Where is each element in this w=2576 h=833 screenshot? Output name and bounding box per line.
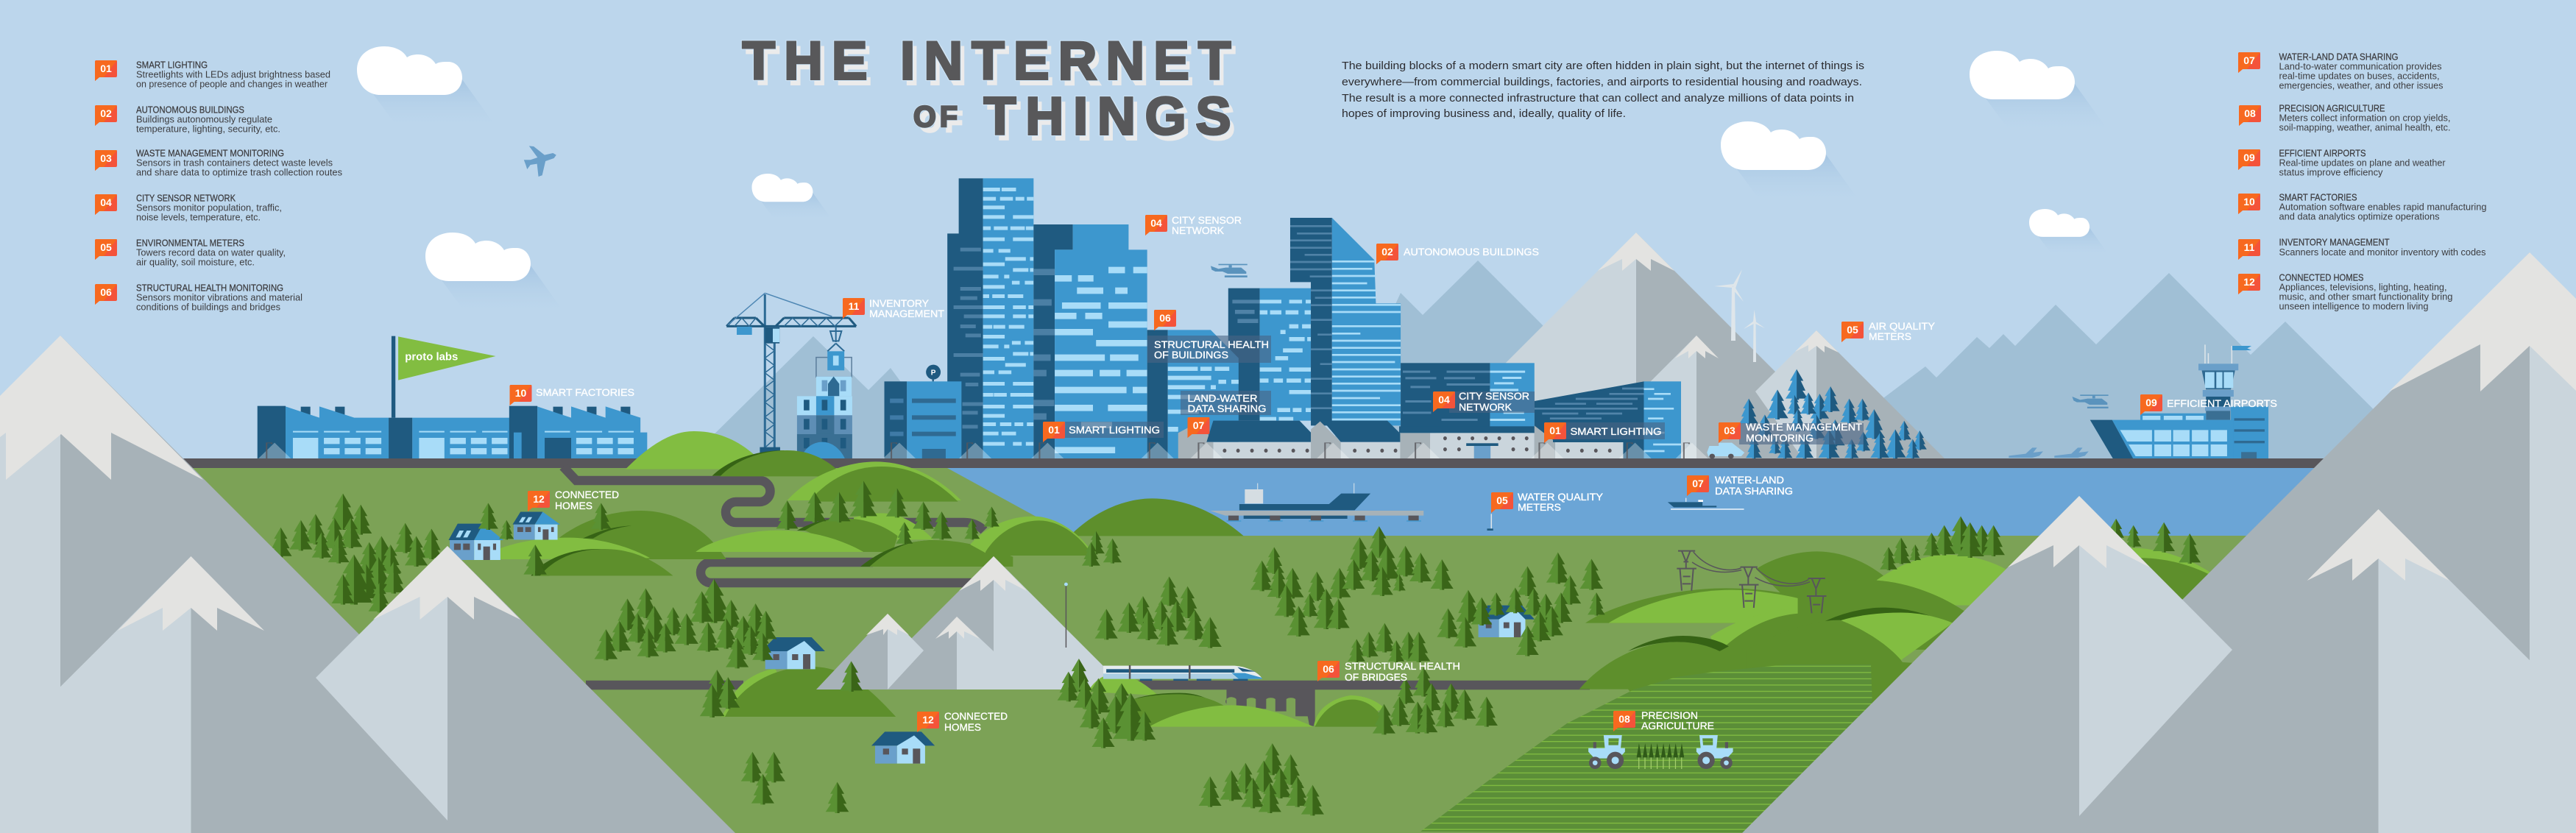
title: The Internet of Things: THINGS bbox=[983, 87, 1231, 146]
legend item 07: emergencies, weather, and other issues bbox=[2279, 79, 2444, 91]
pine trees, centre bbox=[964, 506, 1911, 815]
map label: 08 precision agriculture: PRECISION bbox=[1641, 709, 1698, 721]
map label: 12 connected homes: CONNECTED bbox=[555, 489, 619, 500]
factories, crane and parking building bbox=[258, 293, 961, 458]
legend item 09: EFFICIENT AIRPORTS bbox=[2279, 147, 2366, 159]
icon: tower crane bbox=[726, 293, 856, 458]
map label: 11 inventory management: 11 bbox=[849, 300, 860, 312]
foreground mountains, right bbox=[1742, 252, 2576, 833]
legend item 01: 01 bbox=[100, 63, 112, 74]
legend item 05: air quality, soil moisture, etc. bbox=[136, 256, 255, 268]
map label: 01 smart lighting, second bbox=[1544, 422, 1665, 443]
tower 3 bbox=[1147, 330, 1239, 458]
map label: 07 water-land data sharing bbox=[1687, 474, 1793, 497]
map label: 06 structural health of buildings: 06 bbox=[1159, 312, 1171, 324]
map label: 04 city sensor network, second bbox=[1433, 390, 1535, 413]
icon: ship and pier bbox=[1210, 483, 1423, 522]
legend item 06: Sensors monitor vibrations and material bbox=[136, 291, 302, 303]
hills, upper left bbox=[500, 431, 1013, 717]
crop field with stripes bbox=[1413, 662, 1884, 833]
map label: 04 city sensor network, second: NETWORK bbox=[1459, 401, 1512, 413]
map label: 04 city sensor network bbox=[1145, 214, 1242, 236]
legend item 08: PRECISION AGRICULTURE bbox=[2279, 103, 2385, 113]
intro paragraph bbox=[1342, 60, 1864, 120]
map label: 12 connected homes, second: HOMES bbox=[944, 721, 981, 733]
tower 7 bbox=[1535, 381, 1681, 458]
map label: 01 smart lighting bbox=[1043, 422, 1164, 442]
legend: right list bbox=[2238, 52, 2486, 312]
map label: 12 connected homes, second: 12 bbox=[922, 714, 934, 726]
legend item 05 bbox=[95, 237, 286, 268]
map label: 06 structural health of bridges: STRUCTURAL HEALTH bbox=[1345, 660, 1460, 672]
map label: 02 autonomous buildings: 02 bbox=[1381, 246, 1393, 258]
map label: 04 city sensor network: CITY SENSOR bbox=[1172, 214, 1242, 226]
factory row bbox=[258, 406, 647, 458]
legend item 11: INVENTORY MANAGEMENT bbox=[2279, 237, 2390, 247]
legend item 12: music, and other smart functionality bring bbox=[2279, 291, 2452, 302]
map label: 02 autonomous buildings: AUTONOMOUS BUILDINGS bbox=[1404, 246, 1539, 258]
title: The Internet of Things bbox=[742, 31, 1235, 152]
water bbox=[947, 468, 2340, 536]
airport bbox=[2009, 344, 2268, 458]
Proto Labs flag bbox=[398, 336, 495, 380]
legend item 02: 02 bbox=[100, 107, 112, 119]
grey mountains behind city bbox=[1410, 233, 1945, 458]
map label: 07 land-water data sharing bbox=[1181, 391, 1271, 438]
legend item 10: SMART FACTORIES bbox=[2279, 191, 2357, 203]
map label: 12 connected homes bbox=[528, 489, 619, 511]
legend item 11: 11 bbox=[2244, 241, 2255, 253]
legend item 01: SMART LIGHTING bbox=[136, 59, 208, 71]
map label: 07 water-land data sharing: WATER-LAND bbox=[1715, 474, 1784, 486]
legend item 09: 09 bbox=[2243, 152, 2255, 163]
tractor left bbox=[1588, 735, 1625, 769]
map label: 05 air quality meters bbox=[1841, 320, 1936, 342]
icon: garbage truck bbox=[1707, 443, 1744, 458]
icon: light pole bbox=[1064, 583, 1068, 648]
legend item 01: on presence of people and changes in weather bbox=[136, 78, 328, 90]
foreground mountains, left bbox=[0, 336, 735, 833]
map label: 04 city sensor network: 04 bbox=[1150, 217, 1162, 229]
tower 1 bbox=[947, 178, 1033, 458]
clouds bbox=[357, 46, 2110, 316]
tractor right bbox=[1696, 735, 1733, 769]
map label: 06 structural health of bridges: OF BRIDGES bbox=[1345, 671, 1407, 683]
pine trees, left side bbox=[269, 481, 952, 813]
map label: 04 city sensor network, second: CITY SENSOR bbox=[1459, 390, 1529, 402]
legend item 12: unseen intelligence to modern living bbox=[2279, 300, 2429, 312]
map label: 10 smart factories bbox=[509, 385, 634, 405]
title: The Internet of Things: OF bbox=[919, 106, 963, 138]
intro paragraph: hopes of improving business and, ideally, quality of life. bbox=[1342, 108, 1626, 120]
icon: flag pole bbox=[392, 336, 395, 418]
icon: small boat bbox=[1668, 498, 1744, 510]
map label: 12 connected homes: 12 bbox=[533, 493, 545, 505]
title: The Internet of Things: THINGS bbox=[988, 93, 1235, 152]
map label: 07 water-land data sharing: DATA SHARING bbox=[1715, 485, 1793, 497]
map label: 07 land-water data sharing: DATA SHARING bbox=[1188, 403, 1266, 414]
map label: 05 water quality meters: 05 bbox=[1496, 495, 1508, 506]
winding roads bbox=[563, 467, 1590, 685]
map label: 01 smart lighting: SMART LIGHTING bbox=[1069, 424, 1160, 436]
map label: 06 structural health of buildings: OF BUILDINGS bbox=[1154, 349, 1228, 361]
icon: power line towers bbox=[1677, 551, 1826, 613]
legend item 06: conditions of buildings and bridges bbox=[136, 302, 280, 312]
map label: 05 air quality meters: 05 bbox=[1847, 324, 1858, 336]
map label: 01 smart lighting, second: SMART LIGHTING bbox=[1571, 425, 1662, 437]
hills, far right bbox=[1746, 548, 2211, 833]
map label: 06 structural health of bridges: 06 bbox=[1323, 663, 1334, 675]
legend item 04: CITY SENSOR NETWORK bbox=[136, 193, 236, 203]
map label: 03 waste management monitoring: MONITORING bbox=[1746, 432, 1814, 444]
legend item 07: real-time updates on buses, accidents, bbox=[2279, 71, 2439, 81]
legend item 10: 10 bbox=[2243, 196, 2255, 208]
map label: 05 water quality meters bbox=[1491, 491, 1604, 513]
legend item 04: 04 bbox=[100, 196, 112, 208]
legend item 10: Automation software enables rapid manufacturing bbox=[2279, 202, 2486, 212]
main road along the waterfront bbox=[177, 458, 2333, 468]
map label: 12 connected homes, second bbox=[917, 710, 1008, 733]
legend item 06: STRUCTURAL HEALTH MONITORING bbox=[136, 283, 283, 293]
map label: 08 precision agriculture: 08 bbox=[1618, 713, 1630, 725]
legend item 07: Land-to-water communication provides bbox=[2279, 60, 2442, 72]
under-construction building bbox=[797, 358, 852, 458]
legend item 02: AUTONOMOUS BUILDINGS bbox=[136, 104, 244, 115]
legend item 06: 06 bbox=[100, 286, 112, 298]
map label: 11 inventory management: MANAGEMENT bbox=[869, 308, 944, 319]
map label: 07 land-water data sharing: 07 bbox=[1193, 419, 1204, 431]
icon: tractors and crops bbox=[1588, 735, 1733, 769]
legend item 04 bbox=[95, 193, 282, 222]
legend item 10 bbox=[2238, 191, 2486, 222]
legend item 12: 12 bbox=[2243, 276, 2255, 288]
tower 6 bbox=[1401, 363, 1535, 427]
city buildings: towers bbox=[947, 178, 1681, 458]
legend item 08 bbox=[2239, 103, 2451, 132]
legend item 04: Sensors monitor population, traffic, bbox=[136, 202, 282, 213]
map label: 05 water quality meters: WATER QUALITY bbox=[1518, 491, 1604, 503]
legend item 01 bbox=[95, 59, 330, 90]
map label: 05 water quality meters: METERS bbox=[1518, 501, 1561, 513]
tower 2 bbox=[1033, 224, 1147, 458]
map label: 04 city sensor network: NETWORK bbox=[1172, 224, 1225, 236]
legend item 02: Buildings autonomously regulate bbox=[136, 113, 272, 125]
center snow mountains bbox=[816, 556, 1127, 690]
tower 5 bbox=[1290, 218, 1401, 425]
map label: 12 connected homes: HOMES bbox=[555, 500, 592, 511]
map label: 03 waste management monitoring: 03 bbox=[1724, 425, 1735, 436]
legend item 12: Appliances, televisions, lighting, heating, bbox=[2279, 281, 2446, 293]
hills, centre and right bbox=[970, 498, 1994, 833]
pine forest by the road (blue trees) bbox=[1739, 369, 1927, 458]
title: The Internet of Things: THINGS bbox=[983, 87, 1231, 146]
legend item 09: Real-time updates on plane and weather bbox=[2279, 157, 2446, 168]
map label: 08 precision agriculture: AGRICULTURE bbox=[1641, 720, 1714, 731]
intro paragraph: everywhere—from commercial buildings, factories, and airports to residential housing and roadways. bbox=[1342, 77, 1862, 88]
map label: 10 smart factories: 10 bbox=[515, 387, 526, 399]
icon: high-speed train bbox=[1103, 665, 1262, 681]
legend item 12: CONNECTED HOMES bbox=[2279, 272, 2364, 283]
title: The Internet of Things: OF bbox=[913, 101, 958, 133]
control tower bbox=[2198, 344, 2251, 411]
map label: 05 air quality meters: AIR QUALITY bbox=[1869, 320, 1936, 332]
map label: 07 land-water data sharing: LAND-WATER bbox=[1188, 392, 1257, 404]
map label: 06 structural health of buildings bbox=[1147, 310, 1271, 363]
map label: 06 structural health of bridges bbox=[1317, 660, 1460, 683]
intro paragraph: The building blocks of a modern smart city are often hidden in plain sight, but the internet of things is bbox=[1342, 60, 1864, 72]
legend item 02 bbox=[95, 104, 280, 134]
map label: 02 autonomous buildings bbox=[1376, 244, 1539, 264]
map label: 01 smart lighting, second: 01 bbox=[1549, 425, 1561, 436]
map label: 08 precision agriculture bbox=[1613, 709, 1714, 731]
legend item 10: and data analytics optimize operations bbox=[2279, 210, 2440, 222]
map label: 12 connected homes, second: CONNECTED bbox=[944, 710, 1008, 722]
legend item 03 bbox=[95, 147, 342, 178]
legend item 03: Sensors in trash containers detect waste levels bbox=[136, 157, 333, 168]
pine trees, right side bbox=[1880, 517, 2201, 570]
map label: 05 air quality meters: METERS bbox=[1869, 330, 1911, 342]
icon: wind turbines bbox=[1714, 269, 1765, 362]
legend item 11 bbox=[2238, 237, 2486, 260]
icon: airplane bbox=[524, 146, 556, 177]
parking building bbox=[885, 365, 961, 458]
map label: 07 water-land data sharing: 07 bbox=[1692, 478, 1704, 489]
legend item 02: temperature, lighting, security, etc. bbox=[136, 124, 280, 134]
map label: 03 waste management monitoring bbox=[1719, 421, 1864, 444]
legend item 01: Streetlights with LEDs adjust brightness based bbox=[136, 69, 330, 79]
legend item 11: Scanners locate and monitor inventory with codes bbox=[2279, 247, 2486, 258]
legend item 05: 05 bbox=[100, 241, 112, 253]
legend item 07: WATER-LAND DATA SHARING bbox=[2279, 52, 2398, 62]
legend item 08: Meters collect information on crop yields, bbox=[2279, 112, 2451, 124]
icon: water sensor buoy bbox=[1487, 514, 1493, 531]
intro paragraph: The result is a more connected infrastructure that can collect and analyze millions of data points in bbox=[1342, 93, 1854, 104]
map label: 09 efficient airports: 09 bbox=[2145, 397, 2157, 408]
map label: 04 city sensor network, second: 04 bbox=[1438, 394, 1450, 405]
map label: 03 waste management monitoring: WASTE MANAGEMENT bbox=[1746, 421, 1862, 433]
legend item 08: soil-mapping, weather, animal health, etc. bbox=[2279, 122, 2451, 132]
title: The Internet of Things: THE INTERNET bbox=[742, 31, 1231, 91]
legend item 05: ENVIRONMENTAL METERS bbox=[136, 237, 244, 249]
Proto Labs flag: proto labs bbox=[405, 350, 458, 363]
map label: 01 smart lighting: 01 bbox=[1048, 424, 1060, 436]
legend item 07 bbox=[2238, 52, 2444, 91]
map label: 10 smart factories: SMART FACTORIES bbox=[536, 386, 634, 398]
map label: 11 inventory management bbox=[843, 297, 944, 319]
houses bbox=[448, 512, 1535, 764]
legend item 09 bbox=[2238, 147, 2446, 178]
street lights bbox=[258, 442, 1708, 458]
legend item 07: 07 bbox=[2243, 54, 2255, 66]
parking building: P bbox=[931, 369, 936, 377]
map label: 09 efficient airports bbox=[2140, 394, 2277, 415]
legend item 09: status improve efficiency bbox=[2279, 166, 2383, 178]
title: The Internet of Things: THE INTERNET bbox=[742, 31, 1231, 91]
legend item 03: and share data to optimize trash collection routes bbox=[136, 166, 342, 178]
legend item 06 bbox=[95, 283, 302, 312]
tower 4 bbox=[1228, 288, 1311, 421]
legend item 05: Towers record data on water quality, bbox=[136, 247, 286, 258]
map label: 09 efficient airports: EFFICIENT AIRPORTS bbox=[2167, 397, 2277, 409]
icon: helicopter bbox=[2072, 394, 2109, 408]
icon: parked planes bbox=[2009, 447, 2089, 458]
legend item 03: WASTE MANAGEMENT MONITORING bbox=[136, 147, 284, 159]
icon: helicopter bbox=[1211, 264, 1248, 277]
crops bbox=[1637, 743, 1684, 769]
map label: 11 inventory management: INVENTORY bbox=[869, 297, 930, 309]
title: The Internet of Things: OF bbox=[913, 101, 958, 133]
background mountains bbox=[690, 260, 2423, 458]
title: The Internet of Things: THE INTERNET bbox=[746, 37, 1235, 96]
legend item 03: 03 bbox=[100, 152, 112, 164]
legend item 04: noise levels, temperature, etc. bbox=[136, 212, 261, 222]
terminal bbox=[2090, 406, 2268, 458]
legend item 12 bbox=[2238, 272, 2452, 312]
legend: left list bbox=[95, 59, 342, 312]
low buildings with dotted windows bbox=[1178, 421, 1625, 458]
ground: green land bbox=[0, 468, 2576, 833]
legend item 08: 08 bbox=[2244, 107, 2256, 119]
map label: 06 structural health of buildings: STRUCTURAL HEALTH bbox=[1154, 338, 1269, 350]
